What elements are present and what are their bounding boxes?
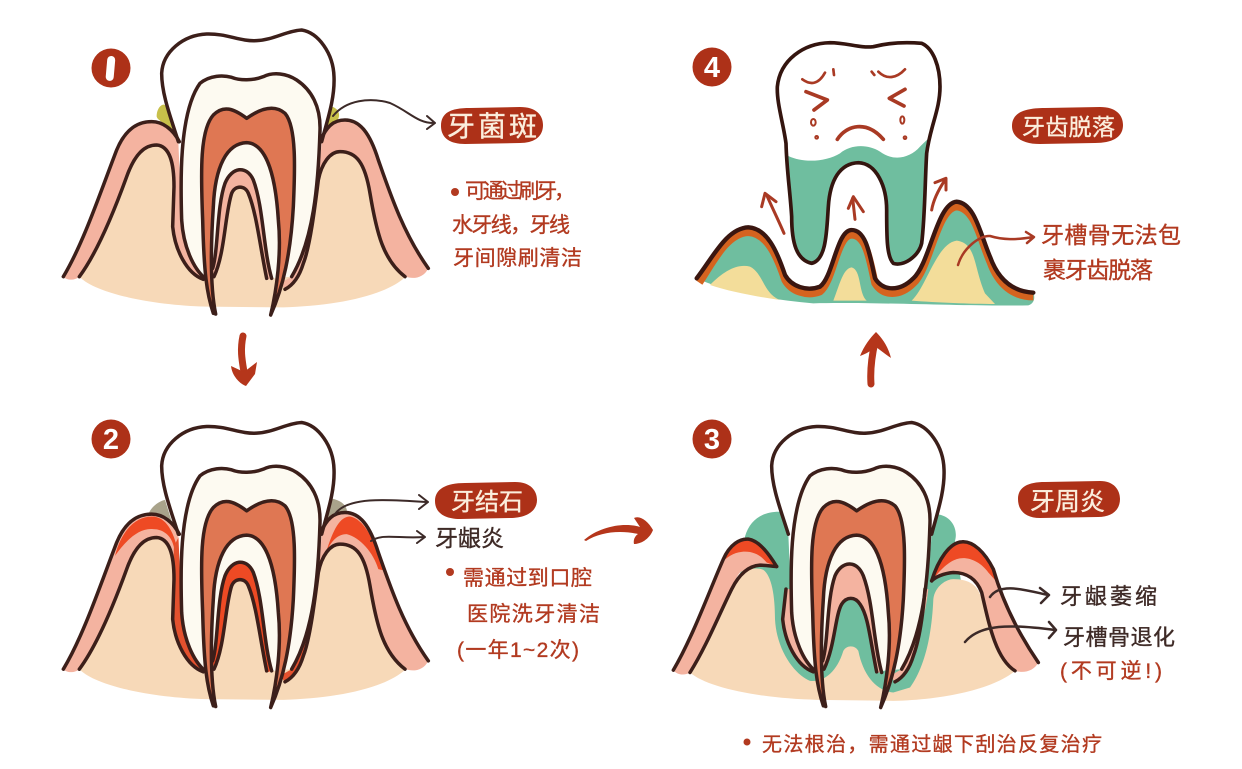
tooth illustration 1: [63, 30, 428, 315]
label pill: periodontitis: 牙周炎: [1030, 488, 1105, 516]
callout arrow to alveolar bone: [958, 232, 1034, 265]
panel 3: periodontitis: [673, 420, 1175, 756]
care note 1: 牙间隙刷清洁: [453, 247, 582, 270]
care note 2: 需通过到口腔: [463, 567, 592, 590]
panel 1: plaque: [63, 30, 582, 315]
tooth illustration 3: [673, 422, 1038, 707]
label: gingivitis: 牙龈炎: [435, 525, 504, 551]
panel 4: tooth loss: [692, 37, 1181, 306]
number badge 4: 4: [704, 52, 720, 84]
number badge 2: [92, 420, 130, 458]
number badge 3: 3: [704, 424, 720, 456]
number badge 2: 2: [103, 424, 119, 456]
label pill: tooth loss: 牙齿脱落: [1022, 114, 1115, 140]
arrow: stage 3 to 4: [860, 332, 891, 384]
callout arrows to tartar and gingivitis: [335, 495, 428, 543]
arrow: stage 1 to 2: [231, 336, 257, 386]
callout arrow to plaque: [333, 100, 435, 129]
callout arrows to gum recession and bone loss: [965, 588, 1056, 642]
label pill: tartar: [435, 482, 537, 519]
tooth illustration 2: [63, 422, 428, 707]
care note 3: 无法根治，需通过龈下刮治反复治疗: [762, 733, 1102, 756]
note: bone cannot hold tooth: [1041, 222, 1181, 283]
label pill: plaque: 牙菌斑: [447, 111, 537, 142]
care note 2: 医院洗牙清洁: [467, 603, 600, 626]
number badge 1: [92, 48, 130, 88]
arrow: stage 2 to 3: [584, 517, 653, 544]
note: bone cannot hold tooth: 牙槽骨无法包: [1041, 222, 1181, 248]
label pill: periodontitis: [1018, 481, 1120, 518]
label: irreversible: (不可逆!): [1060, 660, 1162, 683]
note: bone cannot hold tooth: 裹牙齿脱落: [1043, 257, 1153, 283]
care note 1: 水牙线，牙线: [452, 214, 570, 237]
label pill: tartar: 牙结石: [451, 489, 523, 516]
care note 1: [451, 180, 582, 270]
care note 2: (一年1~2次): [457, 639, 579, 662]
sad face: [802, 69, 906, 139]
tooth illustration 4: [697, 37, 1034, 306]
label pill: tooth loss: [1012, 107, 1123, 144]
panel 2: tartar and gingivitis: [63, 420, 600, 707]
upward motion arrows: [762, 178, 946, 233]
label: alveolar bone loss: 牙槽骨退化: [1063, 625, 1175, 650]
care note 2: [446, 567, 600, 662]
number badge 4: [692, 48, 732, 86]
label: gum recession: 牙龈萎缩: [1060, 584, 1157, 609]
care note 1: 可通过刷牙，: [465, 180, 575, 203]
number badge 3: [692, 420, 732, 458]
